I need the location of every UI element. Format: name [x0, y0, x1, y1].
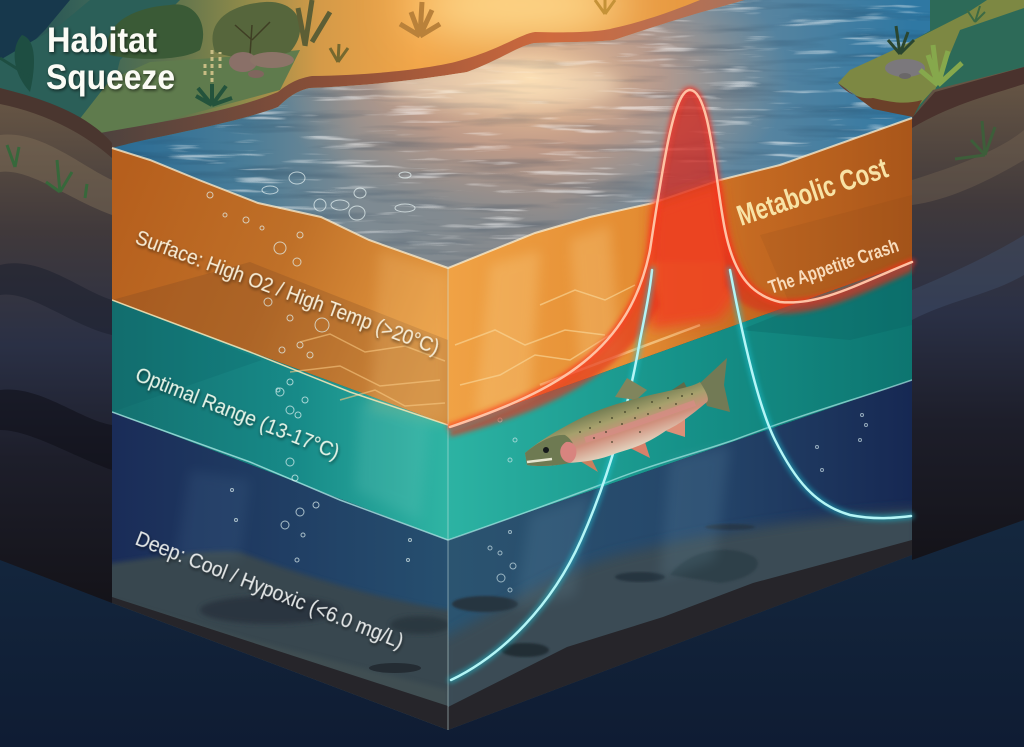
surface band left	[112, 130, 448, 425]
label: surface zone: Surface: High O2 / High Temp (>20°C)	[132, 226, 442, 359]
left foliage	[15, 35, 34, 92]
surface band right	[448, 100, 912, 428]
light rays	[475, 250, 540, 415]
title: Habitat	[47, 21, 157, 60]
teal band left	[112, 300, 448, 540]
title: Squeeze	[46, 58, 175, 97]
title	[46, 21, 175, 97]
label: optimal range: Optimal Range (13-17°C)	[132, 363, 342, 464]
left soil wall	[0, 88, 112, 603]
right face of water column	[440, 100, 920, 735]
head	[525, 435, 575, 466]
left face of water column	[112, 148, 448, 730]
riverbed left	[112, 550, 448, 730]
waterline foam edge	[112, 118, 912, 268]
gill and eye	[560, 442, 576, 463]
deep band right	[448, 381, 912, 643]
metabolic peak glow	[450, 90, 912, 437]
shrubs	[108, 4, 203, 59]
bank edge	[100, 0, 745, 148]
fins	[615, 378, 647, 400]
boundary highlights	[112, 300, 448, 425]
label: deep zone: Deep: Cool / Hypoxic (<6.0 mg/L)	[132, 527, 407, 653]
caustics	[455, 285, 635, 385]
label: the appetite crash: The Appetite Crash	[766, 236, 902, 299]
light rays	[370, 250, 448, 425]
teal boundary highlight	[448, 380, 912, 540]
river surface	[100, 0, 930, 280]
spots	[579, 393, 693, 443]
deep band left	[112, 412, 448, 612]
cyan oxygen curve	[451, 270, 911, 680]
sun glow	[410, 0, 630, 40]
caustics	[290, 334, 445, 406]
body	[525, 382, 708, 466]
lateral stripe	[585, 403, 695, 440]
bubbles	[207, 192, 412, 562]
stones	[229, 52, 257, 72]
plant	[196, 84, 232, 105]
right bank	[838, 0, 1024, 117]
teal band right	[448, 262, 912, 540]
red thermal cost curve	[450, 90, 912, 427]
riverbank landscape	[0, 0, 1024, 160]
riverbed right	[448, 506, 912, 707]
block corner edge	[447, 268, 449, 730]
label: metabolic cost: Metabolic Cost	[733, 152, 892, 233]
rainbow trout	[525, 358, 730, 472]
bubbles	[488, 414, 868, 592]
right soil wall	[912, 67, 1024, 560]
